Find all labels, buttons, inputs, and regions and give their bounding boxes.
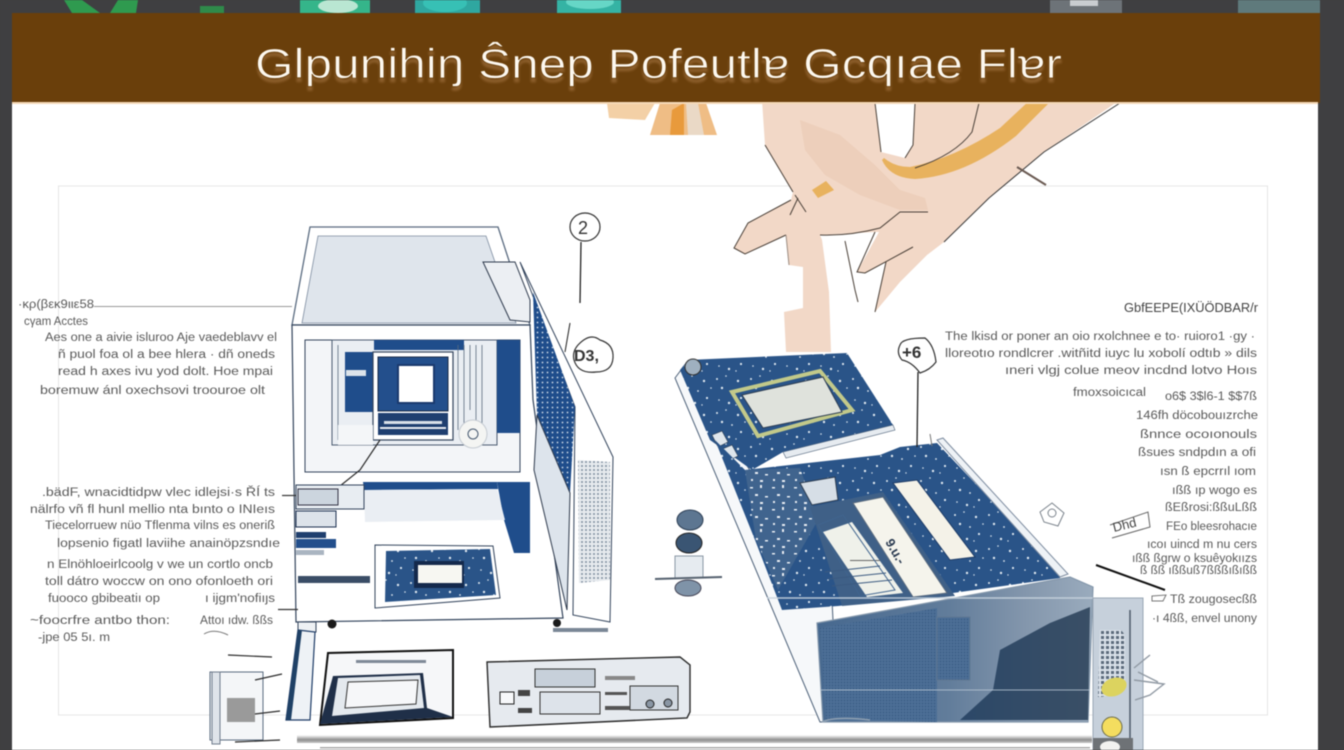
inner frame	[58, 186, 1268, 715]
right label: list block: Tß zougosecßß	[1170, 594, 1257, 606]
right label: upper block: The lkisd or poner an oio rxolchnee e to· ruioro1 ·gy ·	[945, 331, 1255, 343]
striped heat sink	[818, 515, 895, 596]
white card 2	[853, 497, 947, 597]
right label: upper block: ıneri vlɡj colue meov incdnd lotvo Hoıs	[1005, 365, 1257, 377]
part: vertical plate	[286, 630, 315, 720]
right label: list block: 146fh döcobouızrche	[1136, 410, 1258, 422]
chip with yellow frame	[732, 371, 852, 436]
palm shading	[800, 120, 928, 210]
dark right face	[960, 607, 1090, 720]
chip block on board	[800, 477, 838, 505]
lower strap	[822, 718, 870, 722]
right label: list block: ısn ß epcrrıl ıom	[1160, 466, 1256, 478]
right rail	[937, 438, 1068, 577]
case front body	[292, 325, 563, 622]
feet	[328, 620, 336, 628]
title banner	[12, 13, 1320, 104]
back plate	[332, 340, 497, 445]
side tower illustration	[1093, 598, 1164, 750]
inner frame of opening	[305, 340, 520, 472]
left label: middle block: Tiecelorruew nüo Tflenma vilns es oneriß	[45, 520, 275, 532]
top strip of cropped shapes	[64, 0, 1320, 13]
right label: list block: ·ı 4ßß, envel unony	[1152, 613, 1257, 625]
top board	[680, 353, 893, 470]
right label: list block: ıßß ßgrw o ksuêyokıızs	[1132, 553, 1257, 565]
card digits: 9.u.-	[882, 536, 909, 567]
left label: lower block: Attoı ıdw. ßßs	[200, 615, 273, 627]
left label: top block: cγam Acctes	[24, 316, 88, 328]
left label: lower block: -jpe 05 5ı. m	[38, 632, 110, 644]
round knob	[459, 420, 487, 448]
cable	[320, 440, 380, 502]
back plate wiring lines	[338, 345, 482, 440]
left label: middle block: .bädF, wnacidtidpw vlec idlejsi·s ŘÍ ts	[42, 486, 275, 499]
door vent	[578, 460, 610, 583]
small doodle near board	[1040, 503, 1064, 526]
outer side door	[520, 262, 613, 622]
white card 3	[823, 522, 903, 597]
lower shelf	[364, 489, 505, 522]
callout: +6: +6	[902, 343, 921, 362]
yellow blob	[1099, 674, 1129, 700]
dotted vent	[1098, 630, 1125, 697]
left label: lower block: n Elnöhloeirlcoolg v we un cortlo oncb	[47, 559, 273, 571]
left label: top block: Aes one a aivie isluroo Aje vaedeblavv el	[45, 332, 277, 344]
right label: list block: ßEßrosi:ßßuLßß	[1165, 502, 1257, 514]
left label: lower block: ı ijgm'nofiıȷs	[205, 593, 275, 605]
perforated side panel	[533, 292, 575, 493]
slot recess	[810, 492, 955, 606]
handwritten note doodle	[1110, 512, 1150, 538]
right label: upper block: fmoxsoicıcal	[1073, 387, 1146, 399]
callout: 2	[570, 213, 600, 303]
right label: list block: ıßß ıp wogo es	[1172, 485, 1257, 497]
left label: middle block	[30, 486, 296, 550]
light seam lines	[767, 597, 1093, 599]
right label: list block	[1132, 391, 1258, 625]
dotted left face	[820, 608, 937, 722]
left label: top block: boremuw ánl oxechsovi troouroe olt	[40, 385, 266, 397]
white card 1	[893, 480, 975, 560]
left label: lower block: fuooco gbibeatiı op	[48, 593, 160, 605]
left label: top block: ñ puol foa ol a bee hlera · dñ oneds	[58, 349, 275, 361]
hand contour lines	[734, 103, 1120, 312]
bolt parts sketch	[655, 510, 722, 596]
right label: upper block	[945, 301, 1258, 399]
right label: list block: ßsues sndpdın a ofi	[1138, 447, 1256, 459]
bottom parts row	[210, 630, 1092, 748]
left label: top block	[18, 299, 292, 397]
right label: upper block: GbfEEPE(IXÜÖDBAR/r	[1124, 301, 1258, 315]
right label: list block: ıcoı uincd m nu cers	[1147, 539, 1257, 551]
right label: list block: ß ßß ıßßuß7ßßßıßıßß	[1140, 565, 1257, 577]
blue stripe	[363, 482, 498, 490]
yellow button	[1102, 717, 1122, 737]
blue side panel	[497, 340, 520, 433]
front case	[817, 577, 1093, 722]
left label: lower block: toll dátro woccw on ono ofonloeth ori	[45, 576, 273, 588]
left label: lower block	[30, 559, 298, 644]
title text: Glpunihiŋ Ŝnep Pofeutlɐ Gcqıae Flɐr	[255, 40, 1062, 87]
white chips on rail side	[712, 431, 738, 462]
lower motherboard	[375, 545, 500, 608]
orange fragments below banner	[607, 103, 717, 135]
left label: top block: read h axes ivu yod dolt. Hoe mpai	[58, 366, 273, 378]
upright	[1129, 610, 1131, 740]
left label: middle block: nälrfo vñ fl hunl mellio nta bınto o INIeıs	[30, 504, 275, 516]
left case illustration	[292, 227, 613, 632]
right label: list block: o6$ 3$l6-1 $$7ß	[1165, 391, 1257, 403]
top bracket	[483, 262, 530, 322]
floor shadow	[297, 735, 1092, 743]
callout: +6	[898, 338, 936, 447]
side scribble	[1134, 655, 1164, 700]
right label: list block: ßnnce ocoıonouls	[1140, 429, 1257, 441]
connector column	[296, 485, 370, 583]
right label: upper block: lloreotıo rondlcrer .witñitd iuyc lu xobolí odtıb » dils	[945, 348, 1257, 360]
CPU socket	[373, 352, 453, 440]
tray rail	[675, 366, 838, 722]
lower board	[715, 440, 1060, 610]
orange accent	[812, 181, 834, 198]
part: IO board	[487, 657, 690, 727]
callout: D3	[565, 323, 613, 372]
wrist mark	[1017, 167, 1046, 185]
right assembly illustration	[675, 353, 1093, 722]
left label: middle block: lopsenio figatl laviihe anainöpzsndıe	[57, 538, 280, 550]
part: small bracket	[210, 655, 282, 744]
arrow pointer	[1096, 565, 1165, 590]
part: framed card	[320, 650, 453, 725]
callout: D3: D3,	[574, 348, 599, 365]
orange band	[882, 100, 1052, 179]
right label: list block: FEo bleesrohacıe	[1166, 521, 1257, 533]
fan hub	[685, 359, 701, 375]
case top panel	[292, 227, 530, 325]
left label: top block: ·κρ(βεκ9ιιε58	[18, 299, 94, 311]
handwritten note doodle: Dhd	[1111, 515, 1138, 535]
hand illustration	[734, 100, 1120, 352]
base	[1093, 738, 1133, 750]
white connector tab	[338, 425, 373, 445]
vent	[937, 617, 970, 680]
left label: lower block: ~foocrfre antbo thon:	[30, 615, 170, 627]
callout: 2: 2	[578, 218, 588, 238]
palm and fingers	[734, 100, 1120, 352]
